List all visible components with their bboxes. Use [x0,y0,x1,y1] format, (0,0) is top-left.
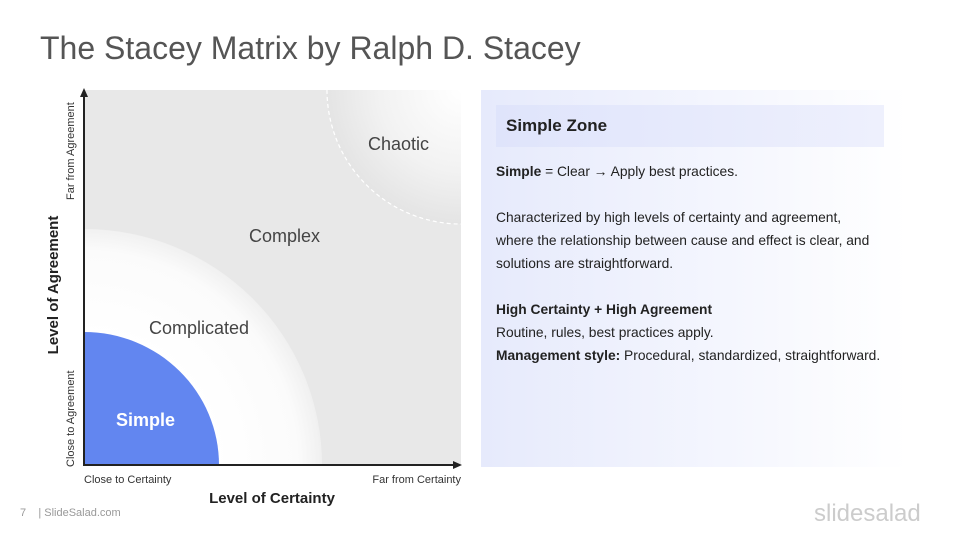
axis labels: Close to Certainty [84,474,172,486]
footer: 7 | SlideSalad.com [20,507,121,519]
chart: stacey matrix: Level of Certainty [209,490,336,507]
zone: simple [84,332,219,465]
labels: Complex [249,226,320,246]
zone: chaotic [327,90,461,224]
panel text: High Certainty + High Agreement [496,302,712,317]
chart: stacey matrix [45,88,462,507]
axis labels: Far from Agreement [65,102,77,200]
panel: simple zone [481,90,908,467]
panel text: Simple = Clear → Apply best practices. [496,164,738,179]
title: The Stacey Matrix by Ralph D. Stacey [40,30,581,66]
logo: slidesalad [814,500,921,527]
panel text: Routine, rules, best practices apply. [496,325,714,340]
panel heading: Simple Zone [506,116,607,135]
panel text: where the relationship between cause and effect is clear, and [496,233,869,248]
panel text: Management style: Procedural, standardized, straightforward. [496,348,880,363]
labels: Simple [116,410,175,430]
labels: Complicated [149,318,249,338]
panel heading [496,105,884,147]
axis labels: Close to Agreement [65,370,77,467]
panel text: Characterized by high levels of certainty and agreement, [496,210,841,225]
labels [116,134,429,430]
panel text [496,164,880,363]
zone: complicated [84,229,322,465]
axis labels [65,102,461,486]
labels: Chaotic [368,134,429,154]
chart: stacey matrix: Level of Agreement [45,216,62,354]
panel text: solutions are straightforward. [496,256,673,271]
zone: complex background [84,90,461,465]
axis labels: Far from Certainty [372,474,461,486]
axes [83,96,454,466]
